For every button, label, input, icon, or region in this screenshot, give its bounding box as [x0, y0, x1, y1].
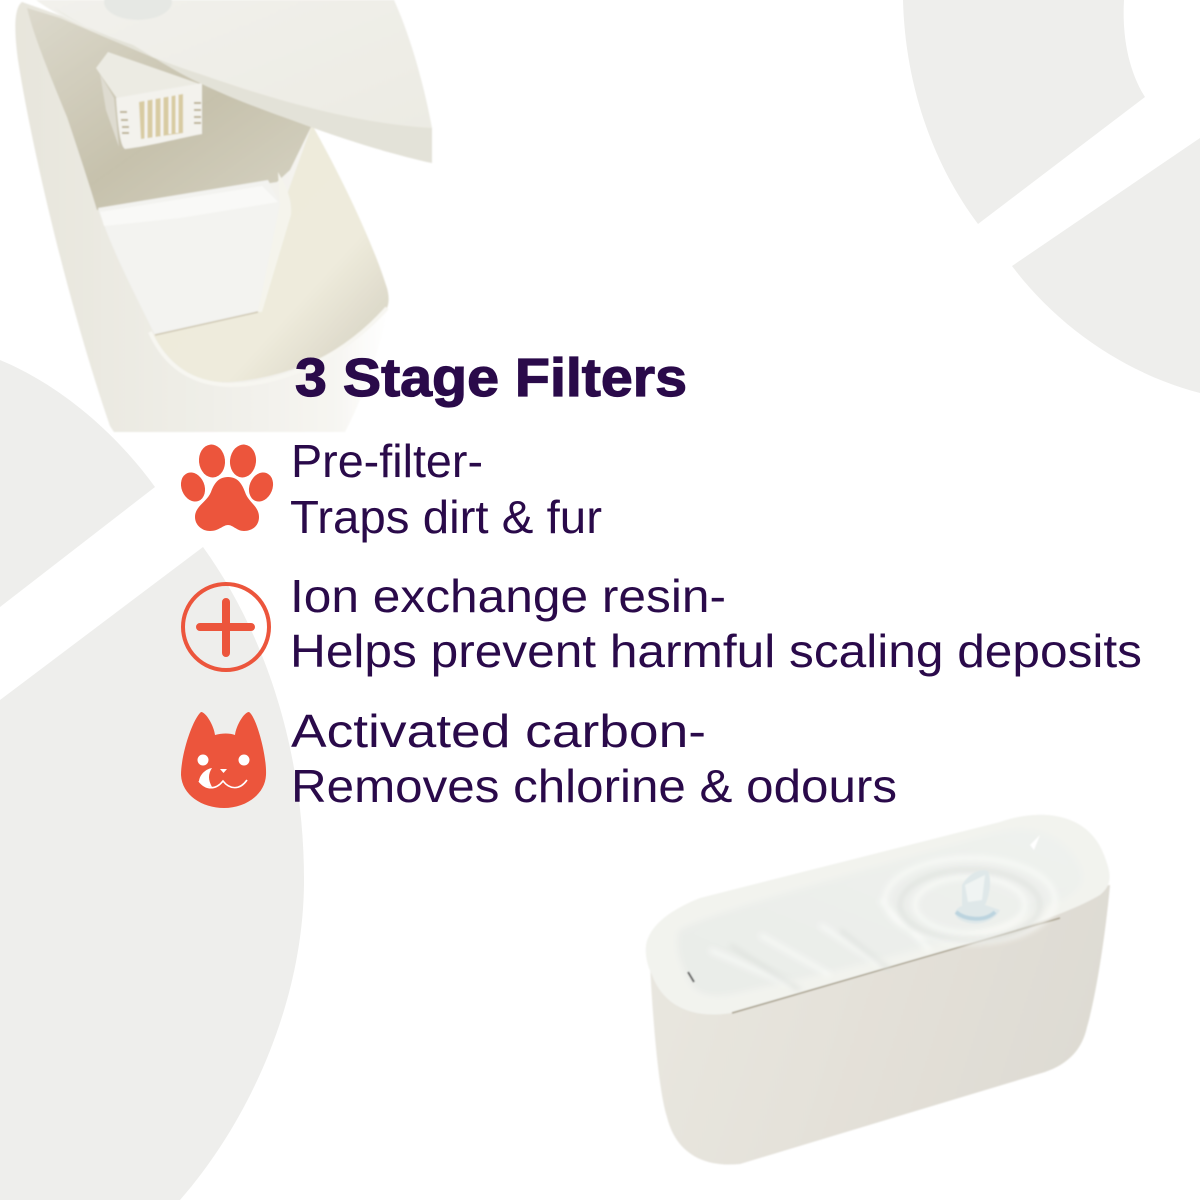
fountain body	[650, 885, 1110, 1165]
background shape: lower left arc	[0, 547, 304, 1200]
background shape: left wedge	[0, 360, 155, 607]
background shape: right arc	[1012, 138, 1200, 393]
text block: pre-filter: Traps dirt & fur	[290, 491, 602, 543]
water ripples	[710, 858, 1055, 985]
text block: ion exchange resin: Ion exchange resin-	[290, 570, 726, 622]
text block: activated carbon: Removes chlorine & odours	[291, 760, 897, 812]
photo: open fountain showing filters	[15, 0, 432, 432]
seam shadow	[732, 918, 1060, 1013]
filter divider ridge	[258, 172, 291, 312]
lid	[36, 0, 432, 163]
water inlet slot	[688, 972, 694, 982]
water spout	[955, 870, 1000, 924]
icon: paw	[177, 443, 277, 531]
lid suction cup	[104, 0, 172, 20]
basin rim highlight	[150, 308, 387, 385]
background shape: top right arc	[903, 0, 1145, 224]
text block: ion exchange resin	[290, 570, 1142, 677]
fountain outer shell	[15, 2, 389, 432]
icon: cat face	[181, 712, 266, 808]
title: 3 Stage Filters	[295, 348, 687, 408]
text block: pre-filter	[290, 435, 602, 543]
highlight	[1030, 835, 1040, 850]
lid rim	[55, 8, 432, 163]
icon: plus in circle	[183, 584, 269, 670]
filter cartridge	[96, 52, 202, 149]
text block: ion exchange resin: Helps prevent harmful scaling deposits	[290, 625, 1142, 677]
text block: activated carbon: Activated carbon-	[291, 705, 706, 757]
text block: activated carbon	[291, 705, 897, 812]
tray inner water	[677, 829, 1082, 995]
fountain cavity wall	[27, 8, 312, 210]
fountain basin floor and right wall	[153, 125, 389, 382]
text block: pre-filter: Pre-filter-	[291, 435, 483, 487]
filter pad	[98, 180, 280, 335]
fountain tray	[646, 815, 1110, 1015]
photo: assembled fountain	[646, 815, 1110, 1165]
